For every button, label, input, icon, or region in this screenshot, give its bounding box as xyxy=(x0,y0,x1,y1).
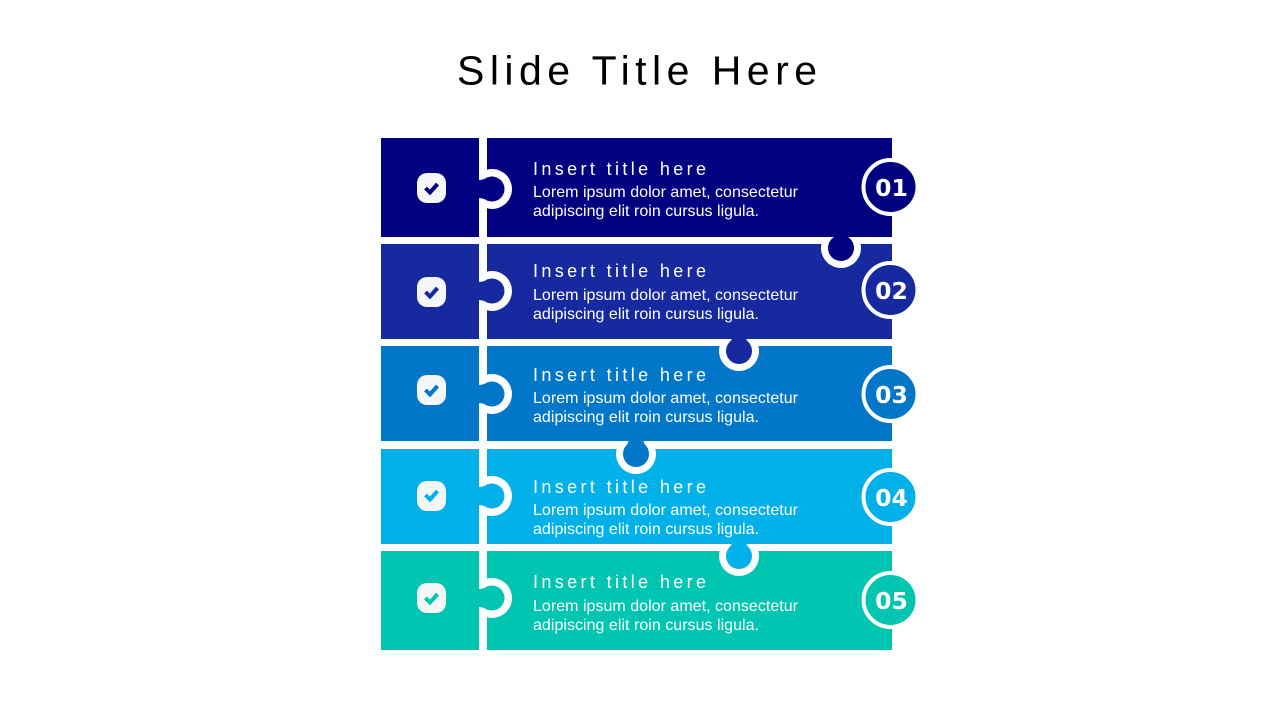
panel: row 3 xyxy=(381,346,918,474)
connector: side tab 5 xyxy=(478,578,512,618)
number badge 02: 02 xyxy=(875,277,908,305)
text: item 5 xyxy=(533,572,799,634)
title: Slide Title Here xyxy=(457,48,817,94)
text: item 1: adipiscing elit roin cursus ligula. xyxy=(533,203,759,220)
text: item 3: Insert title here xyxy=(533,365,706,385)
number badge 03: 03 xyxy=(875,381,908,409)
panel: row 5 xyxy=(381,551,918,650)
text: item 1 xyxy=(533,159,799,220)
text: item 4: Lorem ipsum dolor amet, consectetur xyxy=(533,502,799,519)
connector: bottom tab 4 xyxy=(719,543,759,576)
text: item 3: adipiscing elit roin cursus ligula. xyxy=(533,409,759,426)
connector: side tab 3 xyxy=(478,374,512,414)
text: item 2: adipiscing elit roin cursus ligula. xyxy=(533,306,759,323)
number badge 01 xyxy=(864,160,918,214)
icon: check badge 3 xyxy=(417,375,446,405)
text: item 3 xyxy=(533,365,799,426)
number badge 04: 04 xyxy=(875,484,908,512)
connector: bottom tab 1 xyxy=(821,235,861,268)
text: item 3: Lorem ipsum dolor amet, consectetur xyxy=(533,390,799,407)
text: item 4 xyxy=(533,477,799,538)
text: item 1: Lorem ipsum dolor amet, consectetur xyxy=(533,184,799,201)
connector: side tab 4 xyxy=(478,476,512,516)
number badge 03 xyxy=(864,367,918,421)
number badge 04 xyxy=(864,470,918,524)
panel: row 4 xyxy=(381,449,918,576)
text: item 5: adipiscing elit roin cursus ligula. xyxy=(533,617,759,634)
connector: side tab 2 xyxy=(478,271,512,311)
icon: check badge 1 xyxy=(417,173,446,203)
text: item 5: Lorem ipsum dolor amet, consectetur xyxy=(533,598,799,615)
number badge 05 xyxy=(864,573,918,627)
text: item 5: Insert title here xyxy=(533,572,706,592)
connector: side tab 1 xyxy=(478,169,512,209)
panel: row 1 xyxy=(381,138,918,268)
connector: bottom tab 2 xyxy=(719,338,759,371)
icon: check badge 2 xyxy=(417,277,446,307)
number badge 01: 01 xyxy=(875,174,908,202)
text: item 4: adipiscing elit roin cursus ligula. xyxy=(533,521,759,538)
icon: check badge 4 xyxy=(417,481,446,511)
number badge 02 xyxy=(864,263,918,317)
text: item 1: Insert title here xyxy=(533,159,706,179)
connector: bottom tab 3 xyxy=(616,440,656,474)
text: item 2: Lorem ipsum dolor amet, consectetur xyxy=(533,287,799,304)
text: item 2: Insert title here xyxy=(533,261,706,281)
text: item 2 xyxy=(533,261,799,323)
number badge 05: 05 xyxy=(875,587,908,615)
panel: row 2 xyxy=(381,244,918,371)
text: item 4: Insert title here xyxy=(533,477,706,497)
icon: check badge 5 xyxy=(417,583,446,613)
